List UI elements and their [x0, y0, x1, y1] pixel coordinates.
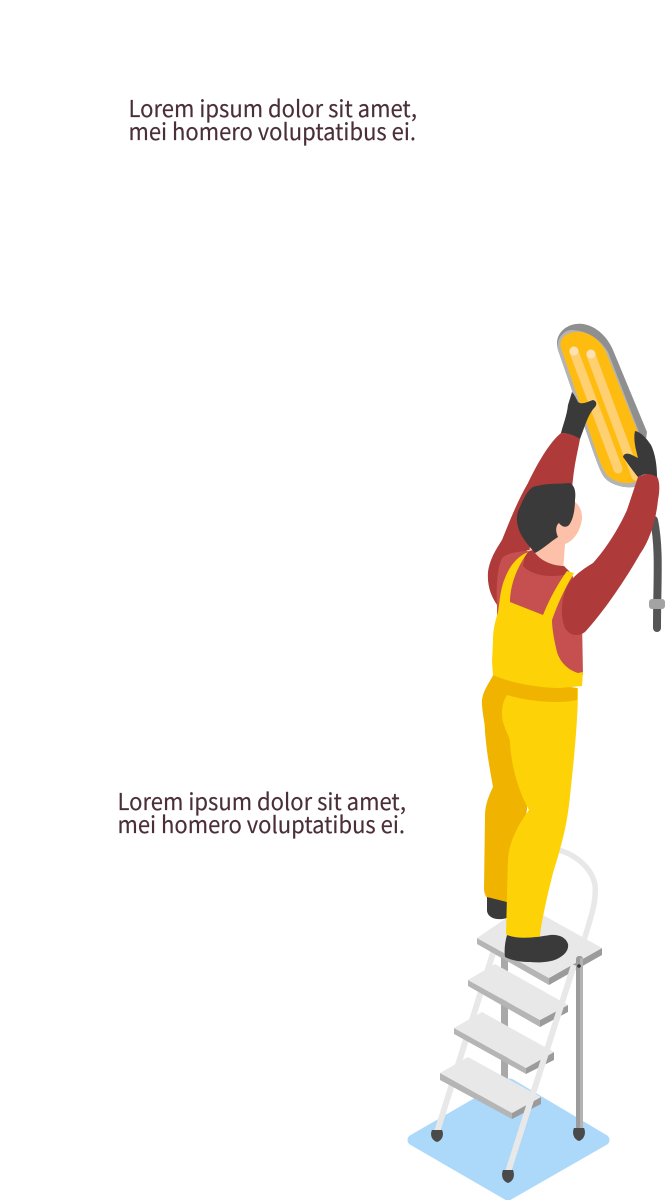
ladder platform [477, 915, 602, 985]
right glove [623, 431, 657, 477]
ladder step three [440, 1057, 541, 1119]
ceiling lamp [557, 324, 647, 487]
lamp housing [557, 324, 647, 487]
front shoe [505, 935, 568, 962]
text block: top caption: mei homero voluptatibus ei. [128, 113, 416, 147]
lamp tube left [570, 346, 618, 469]
ladder right post [573, 956, 585, 1141]
ladder step one [468, 964, 568, 1027]
lamp glass [560, 332, 641, 483]
text block: lower caption: mei homero voluptatibus ei. [118, 806, 405, 840]
blue floor mat [413, 1084, 604, 1195]
collar [523, 550, 571, 576]
worker [482, 392, 659, 962]
ladder back post [501, 955, 508, 1079]
back leg [482, 672, 530, 902]
ladder handrail [558, 850, 595, 960]
lamp tube right [586, 350, 636, 476]
hair [517, 483, 575, 553]
front leg [502, 688, 578, 940]
text block: lower caption [118, 783, 406, 840]
lamp rim [558, 330, 642, 487]
waist shadow [493, 675, 577, 702]
ladder front rail [502, 965, 574, 1183]
overalls bib [492, 552, 583, 688]
left arm [488, 433, 580, 604]
text block: lower caption: Lorem ipsum dolor sit amet, [118, 783, 406, 817]
ladder back-left rail [431, 950, 494, 1142]
right arm [562, 474, 659, 635]
lamp cable [649, 520, 665, 628]
ladder step two [454, 1012, 554, 1074]
torso [488, 550, 583, 675]
left glove [561, 392, 596, 439]
text block: top caption: Lorem ipsum dolor sit amet, [128, 90, 417, 124]
text block: top caption [128, 90, 417, 147]
neck and face [528, 502, 582, 572]
step ladder [431, 850, 602, 1183]
back shoe [487, 897, 507, 919]
